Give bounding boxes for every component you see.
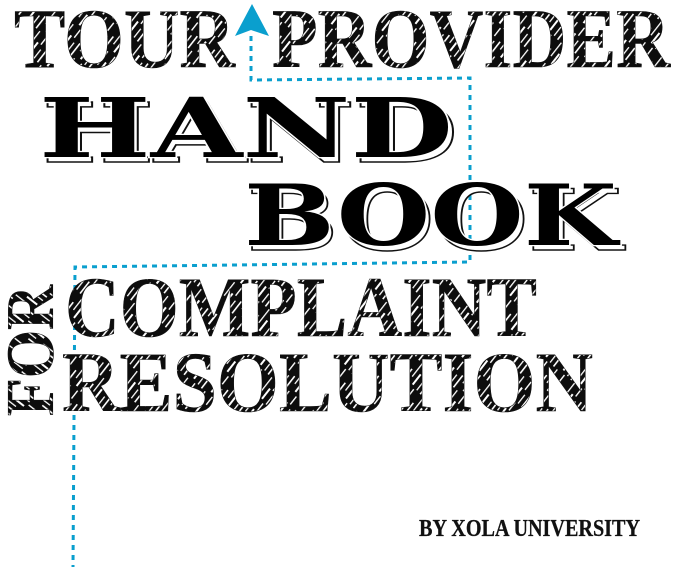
arrow head bbox=[235, 4, 269, 36]
heading: book: BOOK bbox=[244, 166, 621, 265]
heading: tour provider bbox=[14, 0, 671, 86]
heading: hand: HAND bbox=[42, 86, 458, 182]
byline: BY XOLA UNIVERSITY bbox=[419, 516, 640, 542]
heading: book: BOOK bbox=[247, 171, 626, 270]
heading: complaint: COMPLAINT bbox=[65, 259, 537, 355]
heading: hand bbox=[39, 81, 458, 182]
heading: resolution: RESOLUTION bbox=[62, 334, 593, 430]
dotted route line bbox=[73, 36, 470, 567]
heading: hand: HAND bbox=[39, 81, 453, 177]
